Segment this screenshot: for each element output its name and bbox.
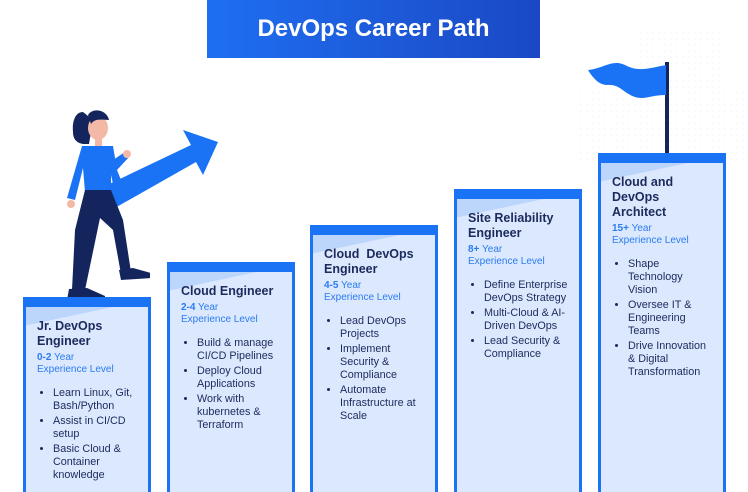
panel: Cloud DevOps Engineer [310,225,438,492]
panel: Site Reliability Engineer [454,189,582,492]
panel: Jr. DevOps Engineer: Basic Cloud & Container knowledge [53,443,121,481]
panel: Site Reliability Engineer: Define Enterprise DevOps Strategy [484,279,567,304]
panel: Cloud Engineer: 2-4 Year [181,302,218,313]
panel: Cloud and DevOps Architect: DevOps [612,190,659,204]
panel: Cloud and DevOps Architect [598,153,726,492]
panel: Cloud DevOps Engineer: Experience Level [324,292,401,303]
panel: Cloud and DevOps Architect: Shape Technology Vision [628,258,683,296]
panel: Cloud and DevOps Architect: Architect [612,205,666,219]
panel: Jr. DevOps Engineer: Jr. DevOps [37,319,102,333]
panel: Jr. DevOps Engineer: Engineer [37,334,90,348]
panel: Cloud Engineer: Deploy Cloud Applications [197,365,262,390]
title: DevOps Career Path [257,15,490,42]
panel: Jr. DevOps Engineer: Assist in CI/CD setup [53,415,126,440]
panel: Cloud Engineer: Experience Level [181,314,258,325]
panel: Cloud Engineer: Work with kubernetes & Terraform [197,393,261,431]
icon: arrow [111,130,218,206]
panel: Cloud DevOps Engineer: Implement Security & Compliance [340,343,397,381]
panel: Cloud and DevOps Architect: Experience Level [612,235,689,246]
dotted background pattern [580,32,744,160]
panel: Cloud and DevOps Architect: Cloud and [612,175,673,189]
panel: Cloud DevOps Engineer: Automate Infrastructure at Scale [340,384,416,422]
panel: Site Reliability Engineer: Engineer [468,226,522,240]
panel: Cloud and DevOps Architect: Oversee IT & Engineering Teams [628,299,691,337]
panel: Cloud DevOps Engineer: Lead DevOps Projects [340,315,406,340]
panel: Cloud Engineer [167,262,295,492]
panel: Site Reliability Engineer: Lead Security & Compliance [484,335,560,360]
panel: Site Reliability Engineer: Site Reliability [468,211,553,225]
panel: Cloud Engineer: Build & manage CI/CD Pipelines [197,337,273,362]
panel: Cloud and DevOps Architect: Drive Innovation & Digital Transformation [628,340,706,378]
icon: woman climbing [67,110,150,297]
panel: Site Reliability Engineer: Experience Level [468,256,545,267]
panel: Cloud and DevOps Architect: 15+ Year [612,223,652,234]
panel: Jr. DevOps Engineer: Learn Linux, Git, Bash/Python [53,387,132,412]
panel: Cloud DevOps Engineer: Cloud DevOps [324,247,414,261]
panel: Jr. DevOps Engineer [23,297,151,492]
panel: Jr. DevOps Engineer: 0-2 Year [37,352,74,363]
panel: Cloud DevOps Engineer: Engineer [324,262,378,276]
panel: Cloud DevOps Engineer: 4-5 Year [324,280,361,291]
panel: Site Reliability Engineer: Multi-Cloud & AI-Driven DevOps [484,307,565,332]
panel: Jr. DevOps Engineer: Experience Level [37,364,114,375]
panel: Cloud Engineer: Cloud Engineer [181,284,273,298]
icon: flag [588,62,669,153]
title [207,0,540,58]
panel: Site Reliability Engineer: 8+ Year [468,244,502,255]
